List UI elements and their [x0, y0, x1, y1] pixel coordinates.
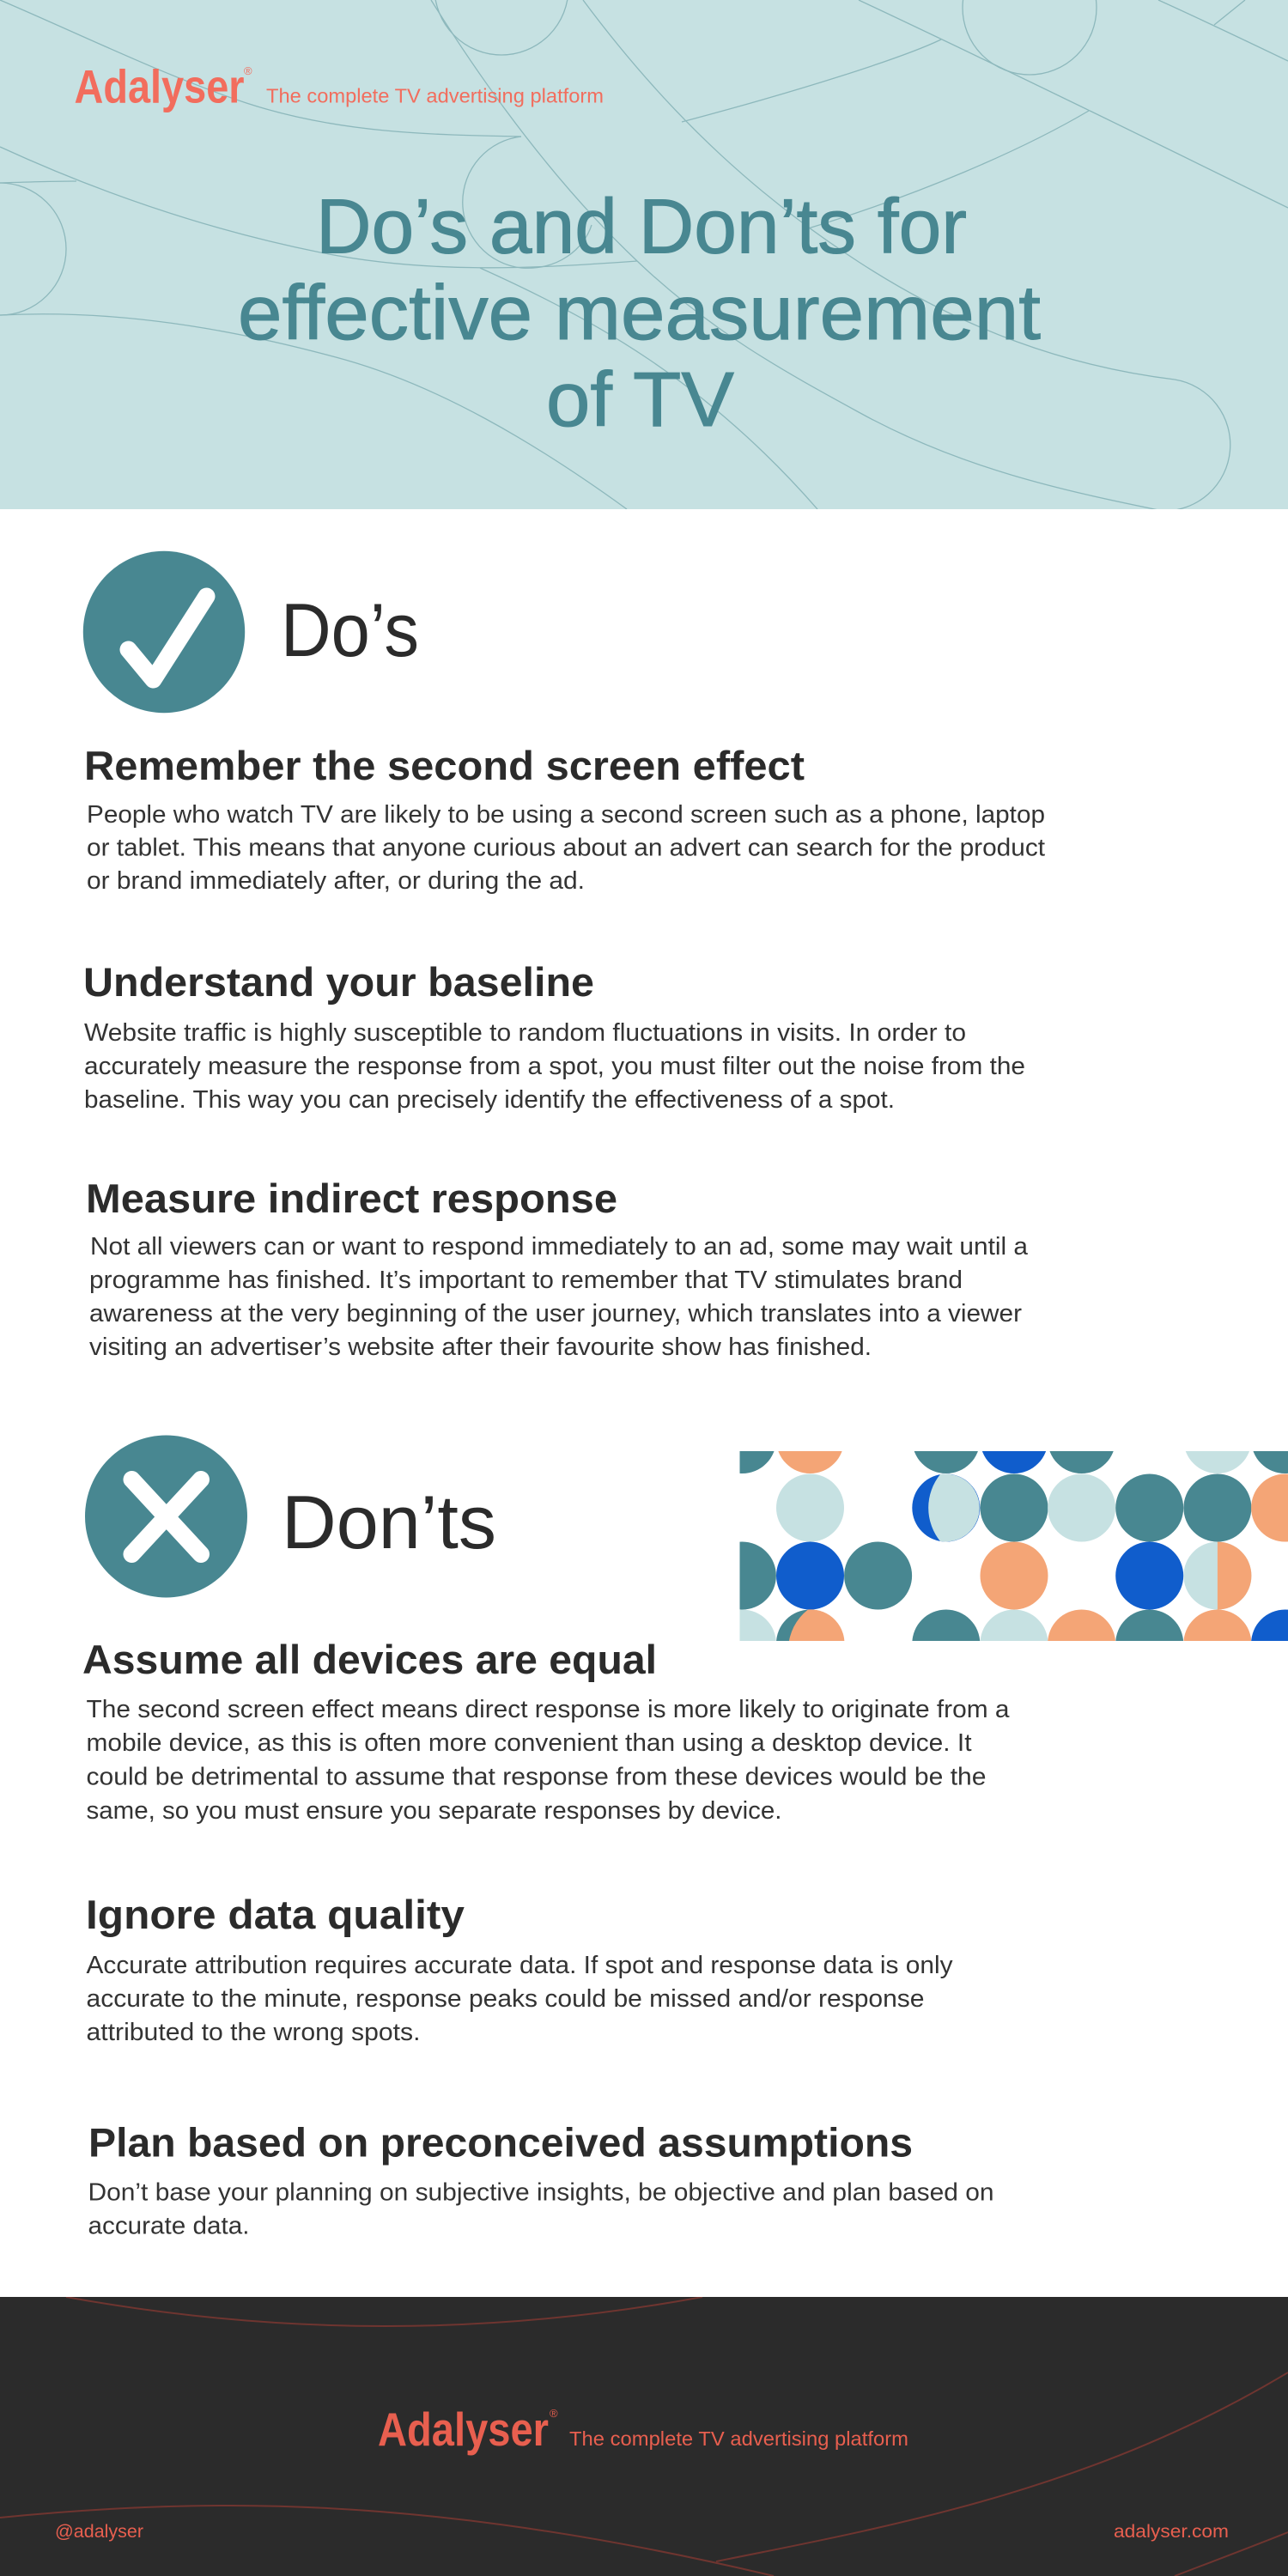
logo: Adalyser: ® [244, 64, 252, 77]
heading: Don'ts: Don’ts [282, 1479, 496, 1564]
footer logo: The complete TV advertising platform [569, 2427, 908, 2450]
block: Understand your baseline: Website traffic is highly susceptible to random fluctuations in visits. In order to [84, 1019, 966, 1047]
footer website: adalyser.com [1114, 2522, 1229, 2542]
block: Assume all devices are equal [82, 1637, 1010, 1825]
block: Remember the second screen effect: Remember the second screen effect [84, 743, 805, 788]
heading: Do's: Do’s [281, 587, 419, 672]
block: Understand your baseline [83, 959, 1025, 1114]
block: Measure indirect response: programme has finished. It’s important to remember that TV stimulates brand [89, 1267, 963, 1294]
block: Assume all devices are equal: mobile device, as this is often more convenient than using a desktop device. It [86, 1729, 972, 1757]
block: Ignore data quality: accurate to the minute, response peaks could be missed and/or response [86, 1985, 924, 2013]
block: Assume all devices are equal: same, so you must ensure you separate responses by device. [86, 1797, 781, 1825]
block: Understand your baseline: Understand your baseline [83, 959, 594, 1005]
block: Measure indirect response: awareness at the very beginning of the user journey, which translates into a viewer [89, 1300, 1022, 1327]
block: Assume all devices are equal: The second screen effect means direct response is more likely to originate from a [86, 1696, 1010, 1723]
block: Ignore data quality: attributed to the wrong spots. [86, 2019, 420, 2046]
block: Assume all devices are equal: Assume all devices are equal [82, 1637, 657, 1682]
title: Do’s and Don’ts for [316, 184, 967, 270]
icon: cross in circle [85, 1436, 247, 1597]
block: Remember the second screen effect: or brand immediately after, or during the ad. [87, 867, 585, 895]
logo: Adalyser: The complete TV advertising platform [266, 84, 604, 106]
block: Remember the second screen effect: People who watch TV are likely to be using a second screen such as a phone, laptop [87, 801, 1045, 829]
block: Ignore data quality [86, 1892, 953, 2046]
icon: check mark in circle [83, 551, 245, 713]
block: Plan based on preconceived assumptions: accurate data. [88, 2213, 249, 2240]
block: Ignore data quality: Accurate attribution requires accurate data. If spot and response data is only [86, 1952, 953, 1979]
block: Remember the second screen effect [84, 743, 1045, 895]
block: Understand your baseline: accurately measure the response from a spot, you must filter out the noise from the [84, 1053, 1025, 1080]
block: Assume all devices are equal: could be detrimental to assume that response from these devices would be the [86, 1764, 986, 1791]
logo: Adalyser [74, 59, 604, 112]
footer logo [378, 2403, 908, 2456]
footer handle: @adalyser [55, 2522, 143, 2542]
block: Measure indirect response: Measure indirect response [86, 1176, 617, 1221]
logo: Adalyser: Adalyser [74, 59, 244, 112]
decorative circle pattern [740, 1451, 1288, 1641]
footer logo: Adalyser [378, 2403, 549, 2456]
block: Plan based on preconceived assumptions: Plan based on preconceived assumptions [88, 2120, 913, 2166]
title [238, 184, 1041, 443]
block: Understand your baseline: baseline. This way you can precisely identify the effectiveness of a spot. [84, 1086, 895, 1114]
title: of TV [546, 357, 734, 443]
title: effective measurement [238, 270, 1041, 356]
block: Measure indirect response: visiting an advertiser’s website after their favourite show has finished. [89, 1334, 872, 1361]
block: Remember the second screen effect: or tablet. This means that anyone curious about an advert can search for the product [87, 835, 1045, 862]
block: Plan based on preconceived assumptions [88, 2120, 994, 2240]
panel: header [0, 0, 1288, 511]
block: Ignore data quality: Ignore data quality [86, 1892, 465, 1937]
panel: footer [0, 2297, 1288, 2576]
block: Measure indirect response [86, 1176, 1029, 1361]
footer logo: ® [550, 2407, 558, 2420]
block: Plan based on preconceived assumptions: Don’t base your planning on subjective insights, be objective and plan based on [88, 2179, 994, 2207]
block: Measure indirect response: Not all viewers can or want to respond immediately to an ad, some may wait until a [90, 1233, 1029, 1261]
